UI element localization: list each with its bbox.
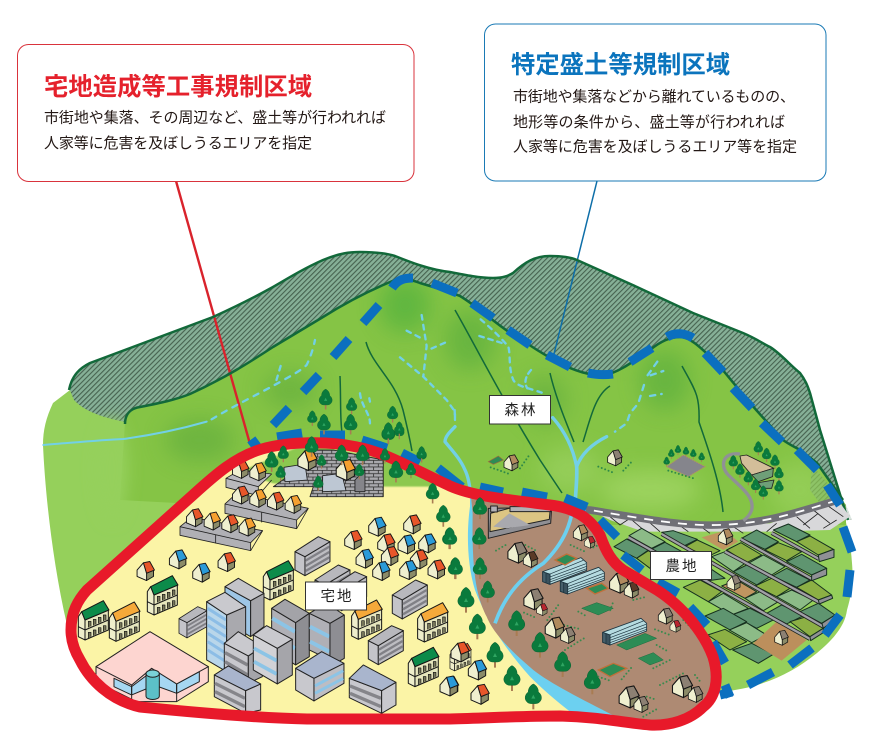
seedling rows <box>496 542 702 717</box>
label: farmland <box>650 552 712 580</box>
low apartment blocks <box>179 537 427 665</box>
label: forest <box>490 396 550 424</box>
high-rise buildings <box>207 578 396 713</box>
scattered detached houses <box>137 515 459 696</box>
description: red zone: 人家等に危害を及ぼしうるエリアを指定 <box>44 134 312 152</box>
housing platforms and stone walls <box>180 450 383 551</box>
trees in the residential area <box>265 424 462 579</box>
label: residential land: 宅地 <box>320 588 352 605</box>
callout: specified fill regulation zone <box>484 24 826 181</box>
heading: blue zone: 特定盛土等規制区域 <box>511 52 730 79</box>
heading: red zone: 宅地造成等工事規制区域 <box>44 74 312 101</box>
faint hatching at lower right of the hill <box>810 465 852 520</box>
leader line: red zone <box>176 181 250 444</box>
small houses in the south of the residential area <box>440 642 489 704</box>
terrain: base fields <box>43 360 852 700</box>
blue dash over red <box>565 498 587 507</box>
farmhouses <box>508 542 527 563</box>
farmland plots <box>614 524 835 663</box>
ridge contour of mountain <box>69 252 848 520</box>
river and farmland <box>468 498 711 720</box>
red boundary: residential land regulation zone <box>71 443 716 725</box>
crop fields <box>555 554 663 677</box>
hillside houses <box>186 449 355 536</box>
greenhouses <box>543 558 587 584</box>
trees along the river and farmland <box>443 498 600 709</box>
terrain: forested hill with shading <box>122 282 846 525</box>
residential zone interior <box>76 448 711 720</box>
description: blue zone: 人家等に危害を及ぼしうるエリア等を指定 <box>513 138 797 156</box>
description: blue zone: 地形等の条件から、盛土等が行われれば <box>513 113 785 131</box>
road <box>100 500 838 662</box>
farmland features <box>488 506 788 717</box>
quarry building <box>488 506 552 538</box>
streams: central and east slopes <box>445 319 663 500</box>
description: red zone <box>44 108 386 152</box>
farm retaining wall below road <box>590 498 850 533</box>
terrain: hatched upper mountain zone <box>69 252 846 510</box>
leader line: blue zone <box>554 181 597 354</box>
label: forest: 森林 <box>504 402 536 419</box>
valley lines on the hill <box>340 310 723 512</box>
streams: west slope <box>43 315 455 445</box>
soft edge of hill against field <box>96 418 128 522</box>
description: blue zone <box>513 88 797 156</box>
label: farmland: 農地 <box>666 558 696 575</box>
trees on the hillside <box>307 389 427 462</box>
blue dashed boundary: specified fill regulation zone <box>250 278 852 697</box>
forest features: houses, lot and quarry <box>488 441 783 521</box>
description: blue zone: 市街地や集落などから離れているものの、 <box>513 88 795 106</box>
shopping centre <box>96 632 208 702</box>
label: residential land <box>306 582 366 610</box>
green patch at upper edge <box>248 448 437 488</box>
description: red zone: 市街地や集落、その周辺など、盛土等が行われれば <box>44 108 386 126</box>
callout: residential land regulation zone <box>18 44 414 182</box>
two-storey houses <box>78 561 471 687</box>
